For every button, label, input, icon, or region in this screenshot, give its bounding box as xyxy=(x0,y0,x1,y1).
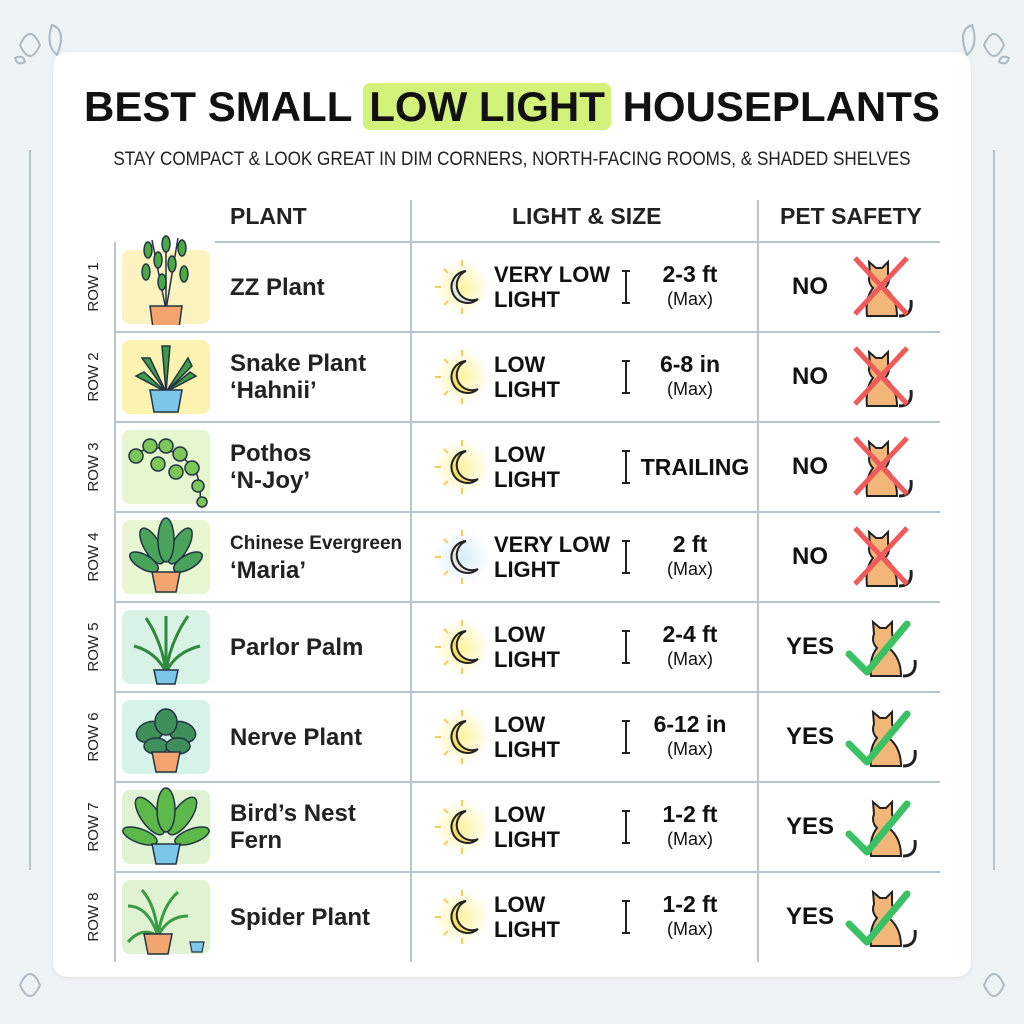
ROW 2: (Max) xyxy=(667,379,713,399)
ROW 4: ‘Maria’ xyxy=(230,557,306,584)
ROW 5: 2-4 ft xyxy=(663,621,717,647)
ROW 7: (Max) xyxy=(667,829,713,849)
ROW 8: LIGHT xyxy=(494,917,560,942)
ROW 8: ROW 8 xyxy=(84,892,102,942)
ROW 6 xyxy=(84,700,917,774)
ROW 4: ROW 4 xyxy=(84,532,102,582)
ROW 6: LOW xyxy=(494,712,545,737)
ROW 4 xyxy=(84,517,913,594)
ROW 7: ROW 7 xyxy=(84,802,102,852)
ROW 1: (Max) xyxy=(667,289,713,309)
ROW 5: LIGHT xyxy=(494,647,560,672)
ROW 8: YES xyxy=(786,903,834,930)
header: pet safety: PET SAFETY xyxy=(780,203,922,229)
icon: pothos xyxy=(128,438,208,508)
ROW 2: ‘Hahnii’ xyxy=(230,377,317,404)
ROW 1: ROW 1 xyxy=(84,262,102,312)
ROW 7: LOW xyxy=(494,802,545,827)
title: BEST SMALL LOW LIGHT HOUSEPLANTS xyxy=(84,83,940,130)
ROW 2: LIGHT xyxy=(494,377,560,402)
ROW 3: LIGHT xyxy=(494,467,560,492)
ROW 7: YES xyxy=(786,813,834,840)
ROW 8: LOW xyxy=(494,892,545,917)
ROW 1: ZZ Plant xyxy=(230,274,325,300)
subtitle: STAY COMPACT & LOOK GREAT IN DIM CORNERS, NORTH-FACING ROOMS, & SHADED SHELVES xyxy=(113,149,911,170)
icon: chinese evergreen xyxy=(129,517,203,593)
ROW 6: 6-12 in xyxy=(654,711,726,737)
ROW 3: ‘N-Joy’ xyxy=(230,467,310,494)
ROW 2: ROW 2 xyxy=(84,352,102,402)
ROW 7 xyxy=(84,787,917,865)
ROW 8: (Max) xyxy=(667,919,713,939)
ROW 6: YES xyxy=(786,723,834,750)
ROW 5: YES xyxy=(786,633,834,660)
ROW 8 xyxy=(84,880,917,955)
icon: snake plant xyxy=(134,345,198,413)
ROW 3: TRAILING xyxy=(641,454,749,480)
ROW 4: LIGHT xyxy=(494,557,560,582)
ROW 3 xyxy=(84,430,913,508)
ROW 7: LIGHT xyxy=(494,827,560,852)
ROW 5: LOW xyxy=(494,622,545,647)
ROW 4: NO xyxy=(792,543,828,570)
ROW 5 xyxy=(84,610,917,685)
ROW 6: (Max) xyxy=(667,739,713,759)
ROW 2: Snake Plant xyxy=(230,350,366,377)
ROW 4: Chinese Evergreen xyxy=(230,533,402,554)
ROW 1: NO xyxy=(792,273,828,300)
ROW 4: VERY LOW xyxy=(494,532,610,557)
ROW 7: Bird’s Nest xyxy=(230,800,356,827)
header: light & size: LIGHT & SIZE xyxy=(512,203,662,229)
ROW 6: Nerve Plant xyxy=(230,724,362,750)
ROW 2: LOW xyxy=(494,352,545,377)
ROW 2: 6-8 in xyxy=(660,351,720,377)
ROW 4: (Max) xyxy=(667,559,713,579)
ROW 1: LIGHT xyxy=(494,287,560,312)
ROW 1: 2-3 ft xyxy=(663,261,717,287)
ROW 5: ROW 5 xyxy=(84,622,102,672)
header: plant: PLANT xyxy=(230,203,307,229)
ROW 2 xyxy=(84,340,913,414)
ROW 6: ROW 6 xyxy=(84,712,102,762)
icon: parlor palm xyxy=(134,615,200,685)
ROW 2: NO xyxy=(792,363,828,390)
ROW 3: NO xyxy=(792,453,828,480)
icon: zz plant xyxy=(141,235,189,325)
icon: nerve plant xyxy=(136,708,196,773)
ROW 1: VERY LOW xyxy=(494,262,610,287)
ROW 3: LOW xyxy=(494,442,545,467)
ROW 8: Spider Plant xyxy=(230,904,370,930)
ROW 7: Fern xyxy=(230,827,282,854)
ROW 3: ROW 3 xyxy=(84,442,102,492)
icon: bird's nest fern xyxy=(122,787,210,865)
ROW 3: Pothos xyxy=(230,440,311,467)
icon: spider plant xyxy=(127,889,205,955)
ROW 6: LIGHT xyxy=(494,737,560,762)
ROW 5: (Max) xyxy=(667,649,713,669)
ROW 5: Parlor Palm xyxy=(230,634,363,660)
ROW 8: 1-2 ft xyxy=(663,891,717,917)
ROW 1 xyxy=(84,235,913,325)
ROW 4: 2 ft xyxy=(673,531,707,557)
ROW 7: 1-2 ft xyxy=(663,801,717,827)
